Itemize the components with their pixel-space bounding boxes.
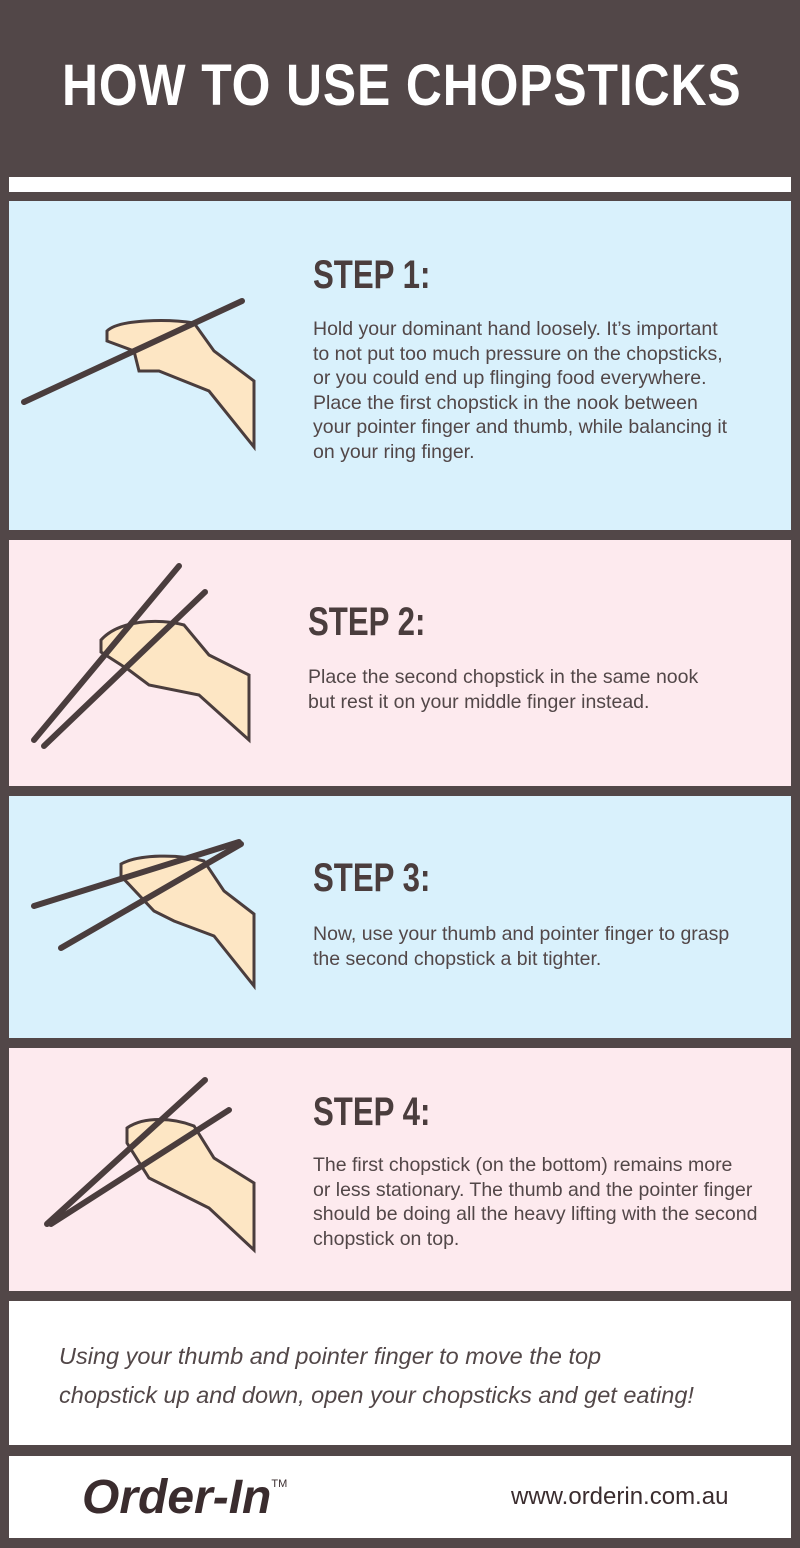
text: [308, 666, 698, 712]
icon: hand step 4: [44, 1077, 256, 1254]
text: the second chopstick a bit tighter.: [313, 948, 601, 970]
url: www.orderin.com.au: [511, 1483, 728, 1510]
text: on your ring finger.: [313, 440, 475, 462]
text: closing: chopstick up and down, open your chopsticks and get eating!: [59, 1382, 694, 1408]
text: should be doing all the heavy lifting with the second: [313, 1203, 757, 1225]
panel: closing note: [9, 1301, 791, 1445]
panel: step 4: [9, 1048, 791, 1291]
icon: hand step 3: [31, 839, 256, 990]
text: chopstick on top.: [313, 1228, 459, 1250]
heading: STEP 4:: [313, 1090, 430, 1134]
text: Now, use your thumb and pointer finger to grasp: [313, 923, 729, 945]
panel: step 1: [9, 201, 791, 530]
panel: step 2: [9, 540, 791, 786]
text: closing: [59, 1343, 694, 1408]
heading: STEP 3:: [313, 856, 430, 900]
text: [313, 1154, 757, 1250]
footer: [9, 1456, 791, 1538]
text: Place the second chopstick in the same nook: [308, 666, 698, 688]
text: your pointer finger and thumb, while balancing it: [313, 416, 727, 438]
icon: hand step 2: [31, 563, 250, 749]
text: or you could end up flinging food everywhere.: [313, 367, 707, 389]
text: [313, 318, 727, 462]
logo: Order-InTM: [82, 1471, 287, 1524]
text: closing: Using your thumb and pointer finger to move the top: [59, 1343, 601, 1369]
text: or less stationary. The thumb and the pointer finger: [313, 1178, 752, 1200]
text: Place the first chopstick in the nook between: [313, 392, 698, 414]
icon: hand step 1: [21, 298, 256, 452]
text: but rest it on your middle finger instead.: [308, 690, 649, 712]
text: The first chopstick (on the bottom) remains more: [313, 1154, 732, 1176]
heading: STEP 1:: [313, 253, 430, 297]
text: Hold your dominant hand loosely. It’s important: [313, 318, 718, 340]
text: [313, 923, 729, 970]
heading: STEP 2:: [308, 600, 425, 644]
title: HOW TO USE CHOPSTICKS: [62, 53, 741, 118]
panel: step 3: [9, 796, 791, 1038]
text: to not put too much pressure on the chopsticks,: [313, 342, 723, 364]
